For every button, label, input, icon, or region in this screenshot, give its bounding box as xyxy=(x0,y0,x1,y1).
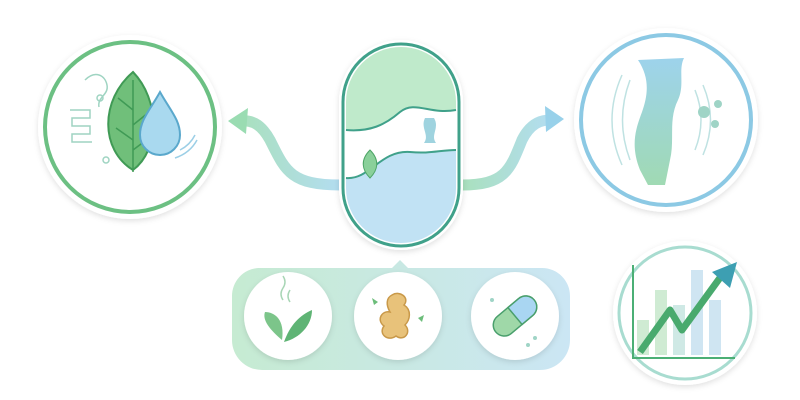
icon: water drop xyxy=(140,92,197,158)
icon: intestines xyxy=(70,75,109,163)
icon: capsule xyxy=(471,272,559,360)
panel: left circle digestion xyxy=(38,35,222,219)
icon: leaf xyxy=(108,72,153,172)
icon: tea leaves xyxy=(244,272,332,360)
arrow: growth xyxy=(640,275,722,352)
panel: growth chart circle xyxy=(613,241,757,385)
icon: small leaf xyxy=(363,150,377,178)
icon: ginger xyxy=(354,272,442,360)
arrow: right xyxy=(462,106,564,185)
icon: small body xyxy=(424,118,436,143)
panel: central pill xyxy=(339,40,463,250)
arrow: left xyxy=(228,108,340,185)
icon: body silhouette xyxy=(635,58,684,185)
panel: right circle body xyxy=(574,28,758,212)
icon: molecule xyxy=(698,100,722,128)
chart: bars xyxy=(637,270,721,355)
panel: ingredients tray xyxy=(232,260,570,370)
icon: waves xyxy=(612,75,710,165)
